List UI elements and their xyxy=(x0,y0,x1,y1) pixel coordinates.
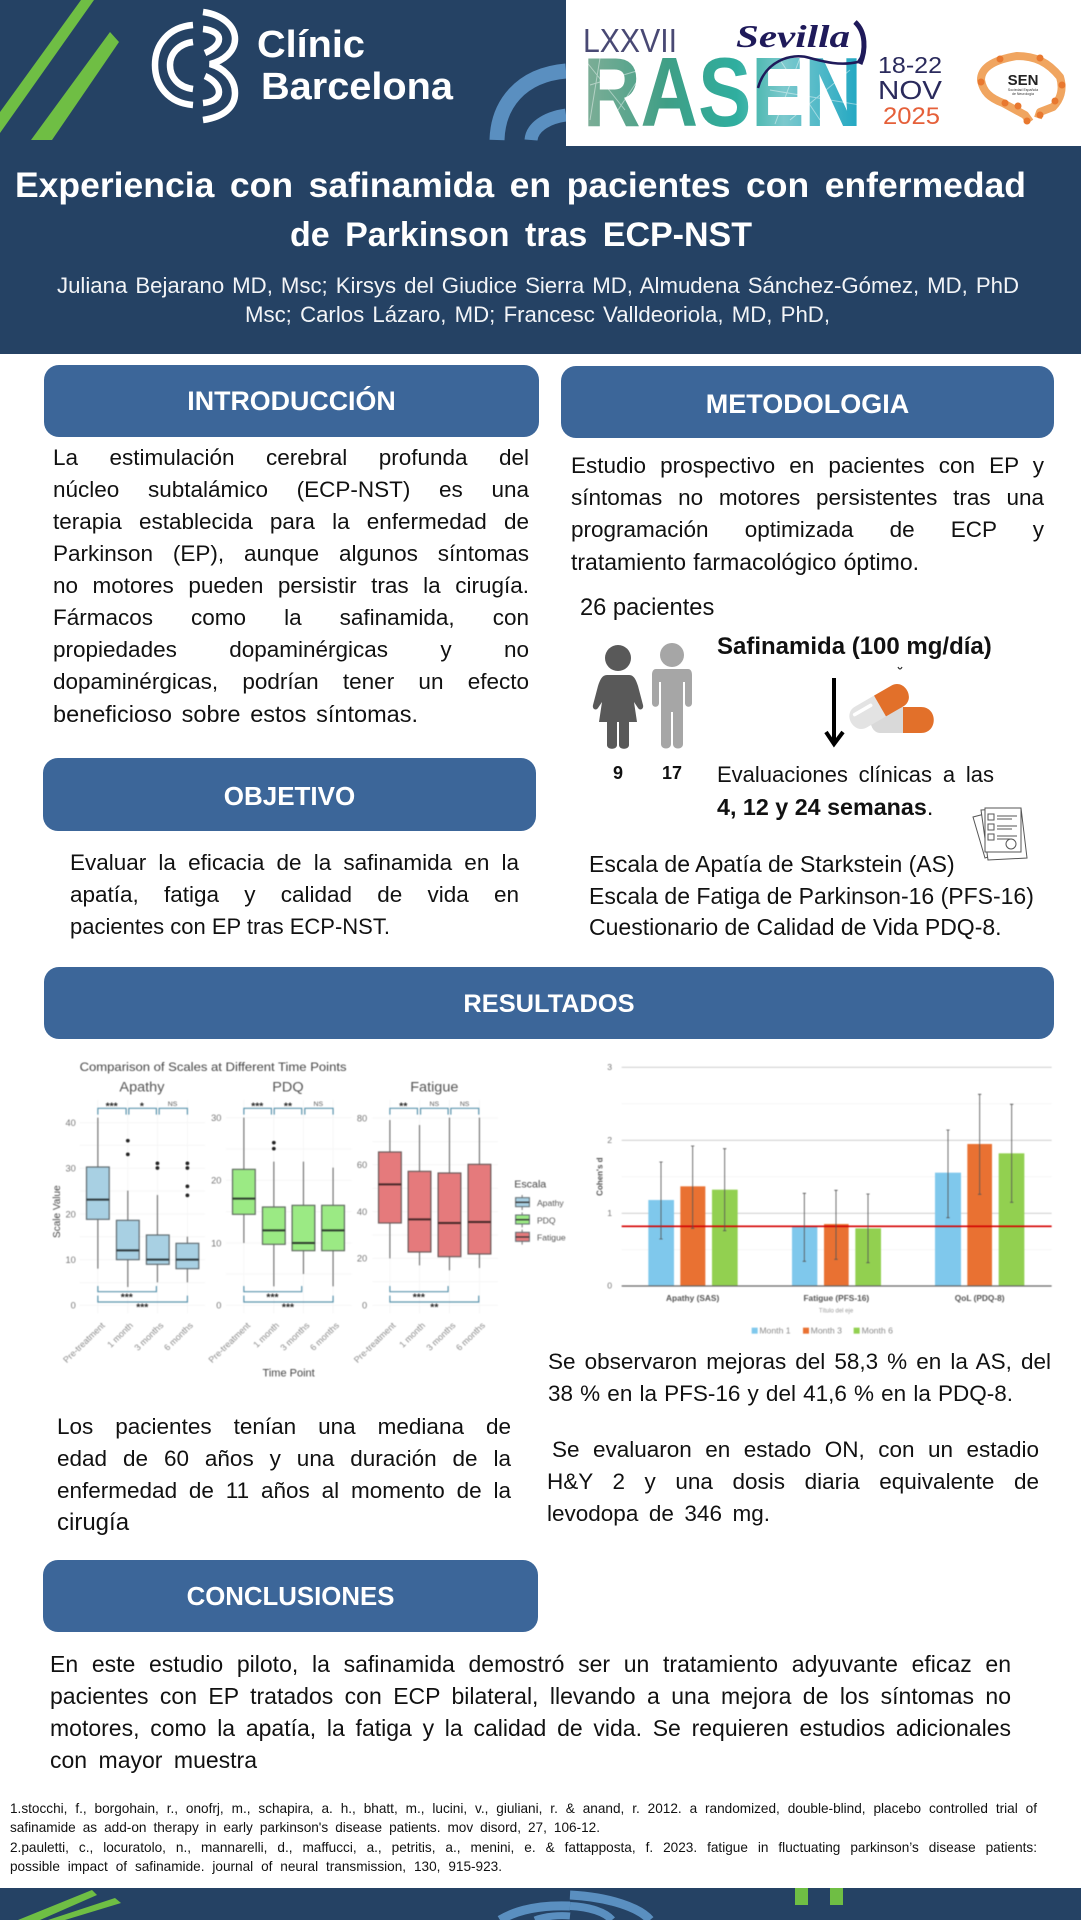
chart: box plots of scales: *** xyxy=(136,1302,148,1313)
chart: Cohen's d bar chart: 2 xyxy=(607,1135,612,1145)
x axis labels: 6 months xyxy=(162,1320,195,1353)
congress logos panel: Sevilla xyxy=(736,18,850,54)
chart: box plots of scales: NS xyxy=(460,1101,470,1108)
chart: box plots of scales: 0 xyxy=(71,1301,76,1311)
chart: box plots of scales: Scale Value xyxy=(52,1185,63,1238)
text: evaluations: Evaluaciones clínicas a las xyxy=(717,762,994,787)
logo text xyxy=(257,24,454,108)
text: references: 1.stocchi, f., borgohain, r., onofrj, m., schapira, a. h., bhatt, m., lucini, v., giuliani, r. & anand, r. 2012. a randomized, double-blind, placebo controlled trial of xyxy=(10,1801,1037,1816)
text: improvements: Se observaron mejoras del 58,3 % en la AS, del xyxy=(548,1349,1051,1374)
congress logos panel: 18-22 xyxy=(878,52,942,78)
x axis labels xyxy=(61,1320,488,1365)
congress logos panel: LXXVII xyxy=(583,22,677,59)
text: conclusions: pacientes con EP tratados con ECP bilateral, llevando a una mejora de los síntomas no xyxy=(50,1683,1011,1709)
legend: PDQ xyxy=(537,1215,556,1225)
chart: box plots of scales: PDQ xyxy=(272,1080,304,1096)
x axis labels: Pre-treatment xyxy=(352,1320,398,1365)
text: scales list: Escala de Apatía de Starkstein (AS) xyxy=(589,851,955,877)
heading: Introducción: INTRODUCCIÓN xyxy=(187,386,396,416)
icon: clipboard documents xyxy=(972,808,1028,860)
congress logos panel: NOV xyxy=(878,75,943,105)
text: objective: apatía, fatiga y calidad de vida en xyxy=(70,882,519,907)
text: introduction: dopaminérgicas, podrían tener un efecto xyxy=(53,669,529,694)
chart: Cohen's d bar chart: 3 xyxy=(607,1062,612,1072)
chart legend: Month 3 xyxy=(811,1325,842,1335)
legend: Apathy xyxy=(537,1198,565,1208)
box plot: PDQ xyxy=(233,1118,344,1286)
chart: Cohen's d bar chart: 1 xyxy=(607,1208,612,1218)
heading: Conclusiones xyxy=(43,1560,538,1632)
heading: Resultados xyxy=(44,967,1054,1039)
text: references: 2.pauletti, c., locuratolo, n., mannarelli, d., maffucci, a., petritis, a., menini, e. & fattapposta, f. 2023. fatigue in fluctuating parkinson’s disease patients: xyxy=(10,1840,1037,1855)
text: evaluation state: Se evaluaron en estado ON, con un estadio xyxy=(552,1437,1039,1462)
chart: box plots of scales: *** xyxy=(266,1292,279,1303)
chart: box plots of scales: *** xyxy=(282,1302,294,1313)
chart: box plots of scales: 40 xyxy=(65,1118,76,1128)
chart: box plots of scales: *** xyxy=(251,1101,263,1112)
chart: box plots of scales: 0 xyxy=(216,1301,221,1311)
chart: box plots of scales: *** xyxy=(106,1101,118,1112)
header band xyxy=(0,0,1081,354)
text: introduction: Fármacos como la safinamida, con xyxy=(53,605,529,630)
title xyxy=(15,165,1026,254)
title: Experiencia con safinamida en pacientes con enfermedad xyxy=(15,165,1026,205)
box plot: Apathy xyxy=(86,1118,199,1287)
x axis labels: 1 month xyxy=(397,1320,427,1350)
footer band xyxy=(0,1888,1081,1920)
box plot: Fatigue xyxy=(379,1118,491,1270)
text: methodology: programación optimizada de ECP y xyxy=(571,517,1044,542)
text: objective: Evaluar la eficacia de la safinamida en la xyxy=(70,850,519,875)
logo text: Barcelona xyxy=(261,66,454,108)
congress logos panel xyxy=(566,0,1081,146)
chart: box plots of scales xyxy=(52,1060,566,1380)
text: female count: 9 xyxy=(613,763,623,783)
chart: box plots of scales: 30 xyxy=(65,1164,76,1174)
text: conclusions: En este estudio piloto, la safinamida demostró ser un tratamiento adyuvante eficaz en xyxy=(50,1651,1011,1677)
chart: box plots of scales: 40 xyxy=(357,1207,367,1217)
heading: Conclusiones: CONCLUSIONES xyxy=(187,1583,394,1611)
text: patient age and duration: Los pacientes tenían una mediana de xyxy=(57,1414,511,1439)
chart: box plots of scales: NS xyxy=(313,1101,324,1108)
text: conclusions: con mayor muestra xyxy=(50,1747,257,1773)
x axis labels: 6 months xyxy=(454,1320,488,1353)
x axis labels: 6 months xyxy=(308,1320,341,1353)
chart title: Comparison of Scales at Different Time Points xyxy=(80,1060,347,1074)
chart: box plots of scales: 10 xyxy=(65,1255,76,1265)
footer graphics xyxy=(18,1888,843,1920)
heading: Introducción xyxy=(44,365,539,437)
text: introduction: terapia establecida para la enfermedad de xyxy=(53,509,529,534)
text: scales list xyxy=(589,851,1034,940)
title: de Parkinson tras ECP-NST xyxy=(290,216,752,254)
chart: Cohen's d bar chart: Apathy (SAS) xyxy=(666,1293,719,1303)
congress logos panel: Sociedad Española xyxy=(1008,88,1038,92)
text: conclusions xyxy=(50,1651,1011,1773)
chart: Cohen's d bar chart: 0 xyxy=(607,1281,612,1291)
text: evaluations xyxy=(717,762,994,820)
text: methodology xyxy=(571,453,1044,575)
text: introduction: Parkinson (EP), aunque algunos síntomas xyxy=(53,541,529,566)
x axis labels: Pre-treatment xyxy=(61,1320,107,1365)
x axis labels: Pre-treatment xyxy=(206,1320,253,1365)
x axis labels: 1 month xyxy=(251,1320,281,1350)
arrow: treatment to evaluation xyxy=(824,678,844,748)
chart: box plots of scales: 20 xyxy=(211,1176,221,1186)
text: patient age and duration: cirugía xyxy=(57,1509,129,1536)
text: introduction: La estimulación cerebral profunda del xyxy=(53,445,529,470)
chart: box plots of scales: ** xyxy=(399,1101,407,1112)
chart: box plots of scales: ** xyxy=(284,1101,292,1112)
heading: Metodologia xyxy=(561,366,1054,438)
text: patient age and duration xyxy=(57,1414,511,1536)
chart: box plots of scales: 0 xyxy=(362,1301,367,1311)
chart: Cohen's d bar chart xyxy=(596,1062,1052,1335)
authors: Juliana Bejarano MD, Msc; Kirsys del Giudice Sierra MD, Almudena Sánchez-Gómez, MD, PhD xyxy=(57,273,1019,298)
congress logos panel: 2025 xyxy=(883,103,940,130)
text: evaluation state: levodopa de 346 mg. xyxy=(547,1501,770,1526)
text: improvements xyxy=(548,1349,1051,1406)
chart: box plots of scales: 20 xyxy=(357,1254,367,1264)
congress logos panel: RASEN xyxy=(583,37,862,147)
text: evaluation state: H&Y 2 y una dosis diaria equivalente de xyxy=(547,1469,1039,1494)
logo: Clínic Barcelona xyxy=(152,8,454,124)
header graphics: stripes and arcs xyxy=(0,0,566,140)
text: scales list: Cuestionario de Calidad de Vida PDQ-8. xyxy=(589,914,1002,940)
chart legend: Month 1 xyxy=(759,1325,791,1335)
text: patient age and duration: edad de 60 años y una duración de la xyxy=(57,1446,511,1471)
heading: Objetivo xyxy=(43,758,536,831)
chart: box plots of scales: *** xyxy=(413,1292,425,1303)
text: references: possible impact of safinamide. journal of neural transmission, 130, 915-923. xyxy=(10,1859,502,1874)
legend: Escala xyxy=(514,1178,546,1190)
text: methodology: tratamiento farmacológico óptimo. xyxy=(571,549,919,575)
chart: Cohen's d bar chart: QoL (PDQ-8) xyxy=(955,1293,1005,1303)
chart: Cohen's d bar chart: Título del eje xyxy=(819,1308,854,1314)
chart: box plots of scales: *** xyxy=(121,1293,133,1304)
legend xyxy=(514,1178,566,1245)
text: objective: pacientes con EP tras ECP-NST. xyxy=(70,914,390,939)
icon: CB symbol xyxy=(152,8,238,124)
legend: Fatigue xyxy=(537,1233,566,1243)
congress logos panel: de Neurología xyxy=(1012,92,1034,96)
text: evaluations: 4, 12 y 24 semanas. xyxy=(717,794,933,820)
x axis labels: 1 month xyxy=(105,1320,135,1350)
text: conclusions: motores, como la apatía, la fatiga y la calidad de vida. Se requieren estudios adicionales xyxy=(50,1715,1011,1741)
logo text: Clínic xyxy=(257,24,365,66)
chart: box plots of scales: NS xyxy=(430,1101,440,1108)
chart: box plots of scales: * xyxy=(140,1101,144,1112)
text: methodology: síntomas no motores persistentes tras una xyxy=(571,485,1044,510)
text: evaluation state xyxy=(547,1437,1039,1526)
authors xyxy=(57,273,1019,327)
significance brackets xyxy=(98,1108,479,1302)
text: methodology: Estudio prospectivo en pacientes con EP y xyxy=(571,453,1044,478)
bars: Fatigue xyxy=(792,1224,881,1286)
chart: Cohen's d bar chart: Cohen's d xyxy=(596,1157,605,1196)
chart: box plots of scales: Time Point xyxy=(263,1368,315,1380)
chart: box plots of scales: Fatigue xyxy=(410,1080,459,1096)
text: introduction: núcleo subtalámico (ECP-NST) es una xyxy=(53,477,529,502)
text: improvements: 38 % en la PFS-16 y del 41,6 % en la PDQ-8. xyxy=(548,1381,1013,1406)
text: introduction: beneficioso sobre estos síntomas. xyxy=(53,701,418,727)
chart: box plots of scales: 20 xyxy=(65,1209,76,1219)
chart: Cohen's d bar chart: Fatigue (PFS-16) xyxy=(803,1293,869,1303)
chart: box plots of scales: Apathy xyxy=(119,1080,165,1096)
text: objective xyxy=(70,850,519,939)
heading: Objetivo: OBJETIVO xyxy=(224,781,355,811)
chart legend: Month 6 xyxy=(862,1325,893,1335)
text: scales list: Escala de Fatiga de Parkinson-16 (PFS-16) xyxy=(589,882,1034,908)
text: male count: 17 xyxy=(662,763,682,783)
text: patient age and duration: enfermedad de 11 años al momento de la xyxy=(57,1478,511,1503)
text: references xyxy=(10,1801,1038,1874)
chart: box plots of scales: 30 xyxy=(211,1113,221,1123)
chart: box plots of scales: NS xyxy=(168,1101,178,1108)
text: patient count: 26 pacientes xyxy=(580,595,714,621)
text: introduction xyxy=(53,445,529,727)
x axis labels: 3 months xyxy=(278,1320,312,1353)
x axis labels: 3 months xyxy=(132,1320,166,1353)
icon: female and male figures xyxy=(592,643,692,749)
text: references: safinamide as add-on therapy in early parkinson's disease patients. mov disord, 27, 106-12. xyxy=(10,1820,600,1835)
heading: Metodologia: METODOLOGIA xyxy=(706,389,909,419)
text: introduction: no motores pueden persistir tras la cirugía. xyxy=(53,573,529,598)
heading: Resultados: RESULTADOS xyxy=(463,990,635,1018)
text: introduction: propiedades dopaminérgicas y no xyxy=(53,637,529,662)
x axis labels: 3 months xyxy=(424,1320,458,1353)
error bars xyxy=(659,1094,1013,1263)
icon: capsules xyxy=(850,666,934,733)
congress logos panel: SEN xyxy=(1008,72,1038,89)
bars: Apathy xyxy=(648,1186,738,1286)
chart: box plots of scales: ** xyxy=(430,1302,438,1313)
chart: box plots of scales: 80 xyxy=(357,1113,367,1123)
chart: box plots of scales: 60 xyxy=(357,1160,367,1170)
authors: Msc; Carlos Lázaro, MD; Francesc Valldeoriola, MD, PhD, xyxy=(245,302,830,327)
text: drug dose: Safinamida (100 mg/día) xyxy=(717,633,992,660)
chart: box plots of scales: 10 xyxy=(211,1238,221,1248)
chart legend xyxy=(752,1325,893,1335)
bars: QoL xyxy=(935,1144,1024,1286)
